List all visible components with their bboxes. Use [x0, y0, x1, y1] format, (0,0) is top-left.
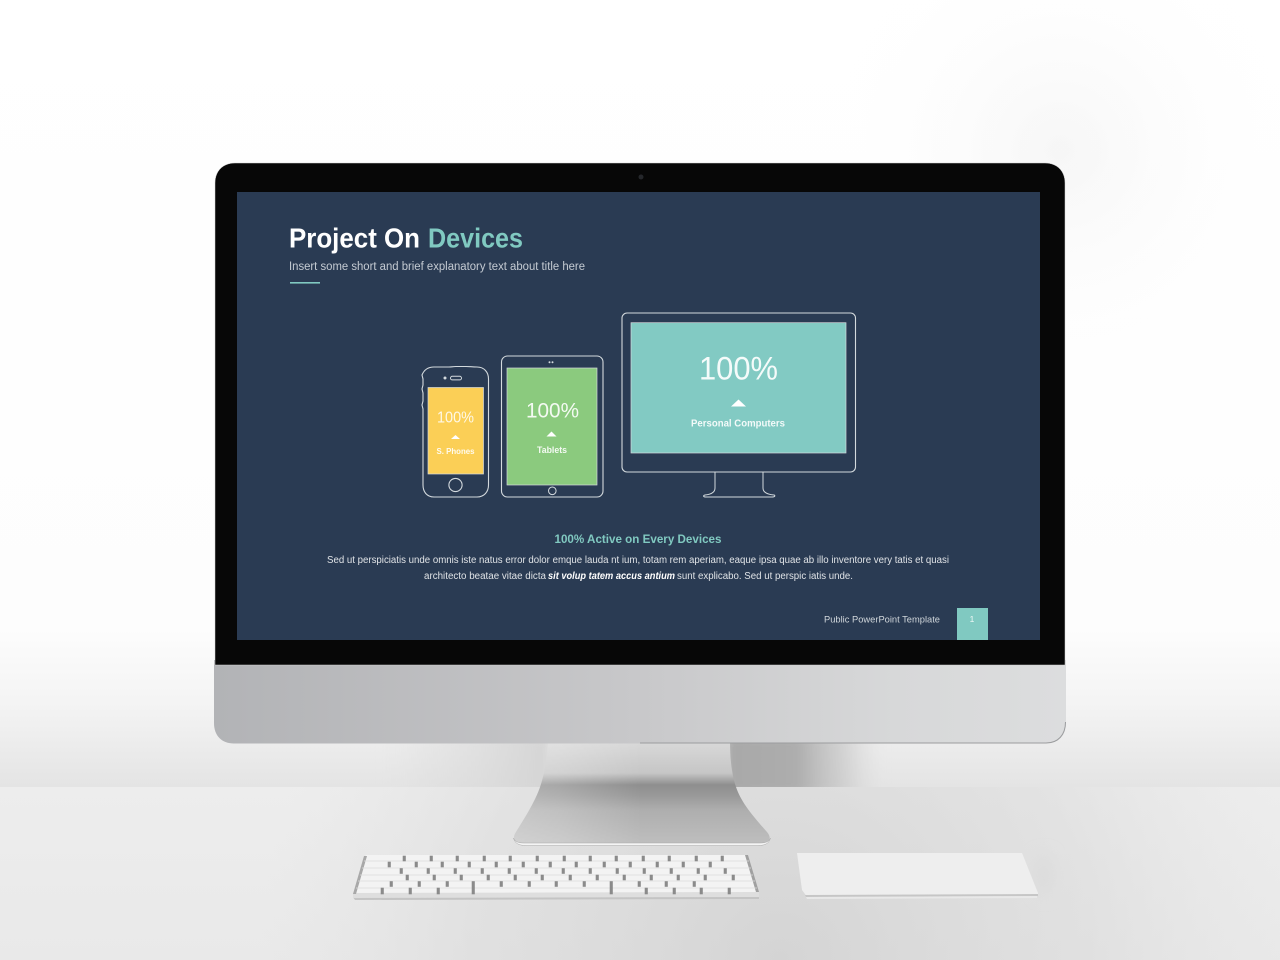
device: tablet: [502, 356, 603, 497]
monitor black bezel: [215, 163, 1065, 665]
monitor body: [214, 163, 1066, 744]
device: desktop monitor: [622, 313, 856, 497]
title: Devices: [428, 222, 523, 254]
footer label: Public PowerPoint Template: [824, 614, 940, 626]
monitor camera: [638, 174, 644, 180]
device: desktop monitor: 100%: [699, 350, 778, 386]
device: tablet: 100%: [526, 398, 579, 422]
title: [289, 222, 523, 254]
subtitle: Insert some short and brief explanatory text about title here: [289, 261, 585, 273]
page number box: [957, 608, 988, 640]
monitor chin: [214, 660, 1066, 744]
device: tablet: Tablets: [537, 445, 567, 455]
slide screen: [237, 192, 1040, 640]
monitor stand: [514, 743, 770, 846]
body paragraph: sit volup tatem accus antium: [548, 571, 675, 582]
keyboard: [353, 855, 759, 900]
device: smartphone: S. Phones: [436, 447, 475, 456]
body paragraph: architecto beatae vitae dicta: [424, 571, 546, 582]
body paragraph: sunt explicabo. Sed ut perspic iatis unde.: [677, 571, 853, 582]
body paragraph: [327, 555, 949, 582]
title: Project On: [289, 222, 420, 254]
title underline: [290, 282, 320, 284]
trackpad: [797, 853, 1038, 899]
monitor chin rim: [640, 722, 1066, 743]
body heading: 100% Active on Every Devices: [554, 534, 722, 546]
page number box: 1: [970, 614, 975, 624]
keyboard row lines: [356, 861, 757, 888]
device: smartphone: [422, 366, 488, 497]
keyboard key gaps: [381, 856, 734, 894]
body paragraph: Sed ut perspiciatis unde omnis iste natus error dolor emque lauda nt ium, totam rem aperiam, eaque ipsa quae ab illo inventore very tatis et quasi: [327, 555, 949, 566]
device: smartphone: 100%: [437, 410, 474, 426]
device: desktop monitor: Personal Computers: [691, 418, 785, 430]
